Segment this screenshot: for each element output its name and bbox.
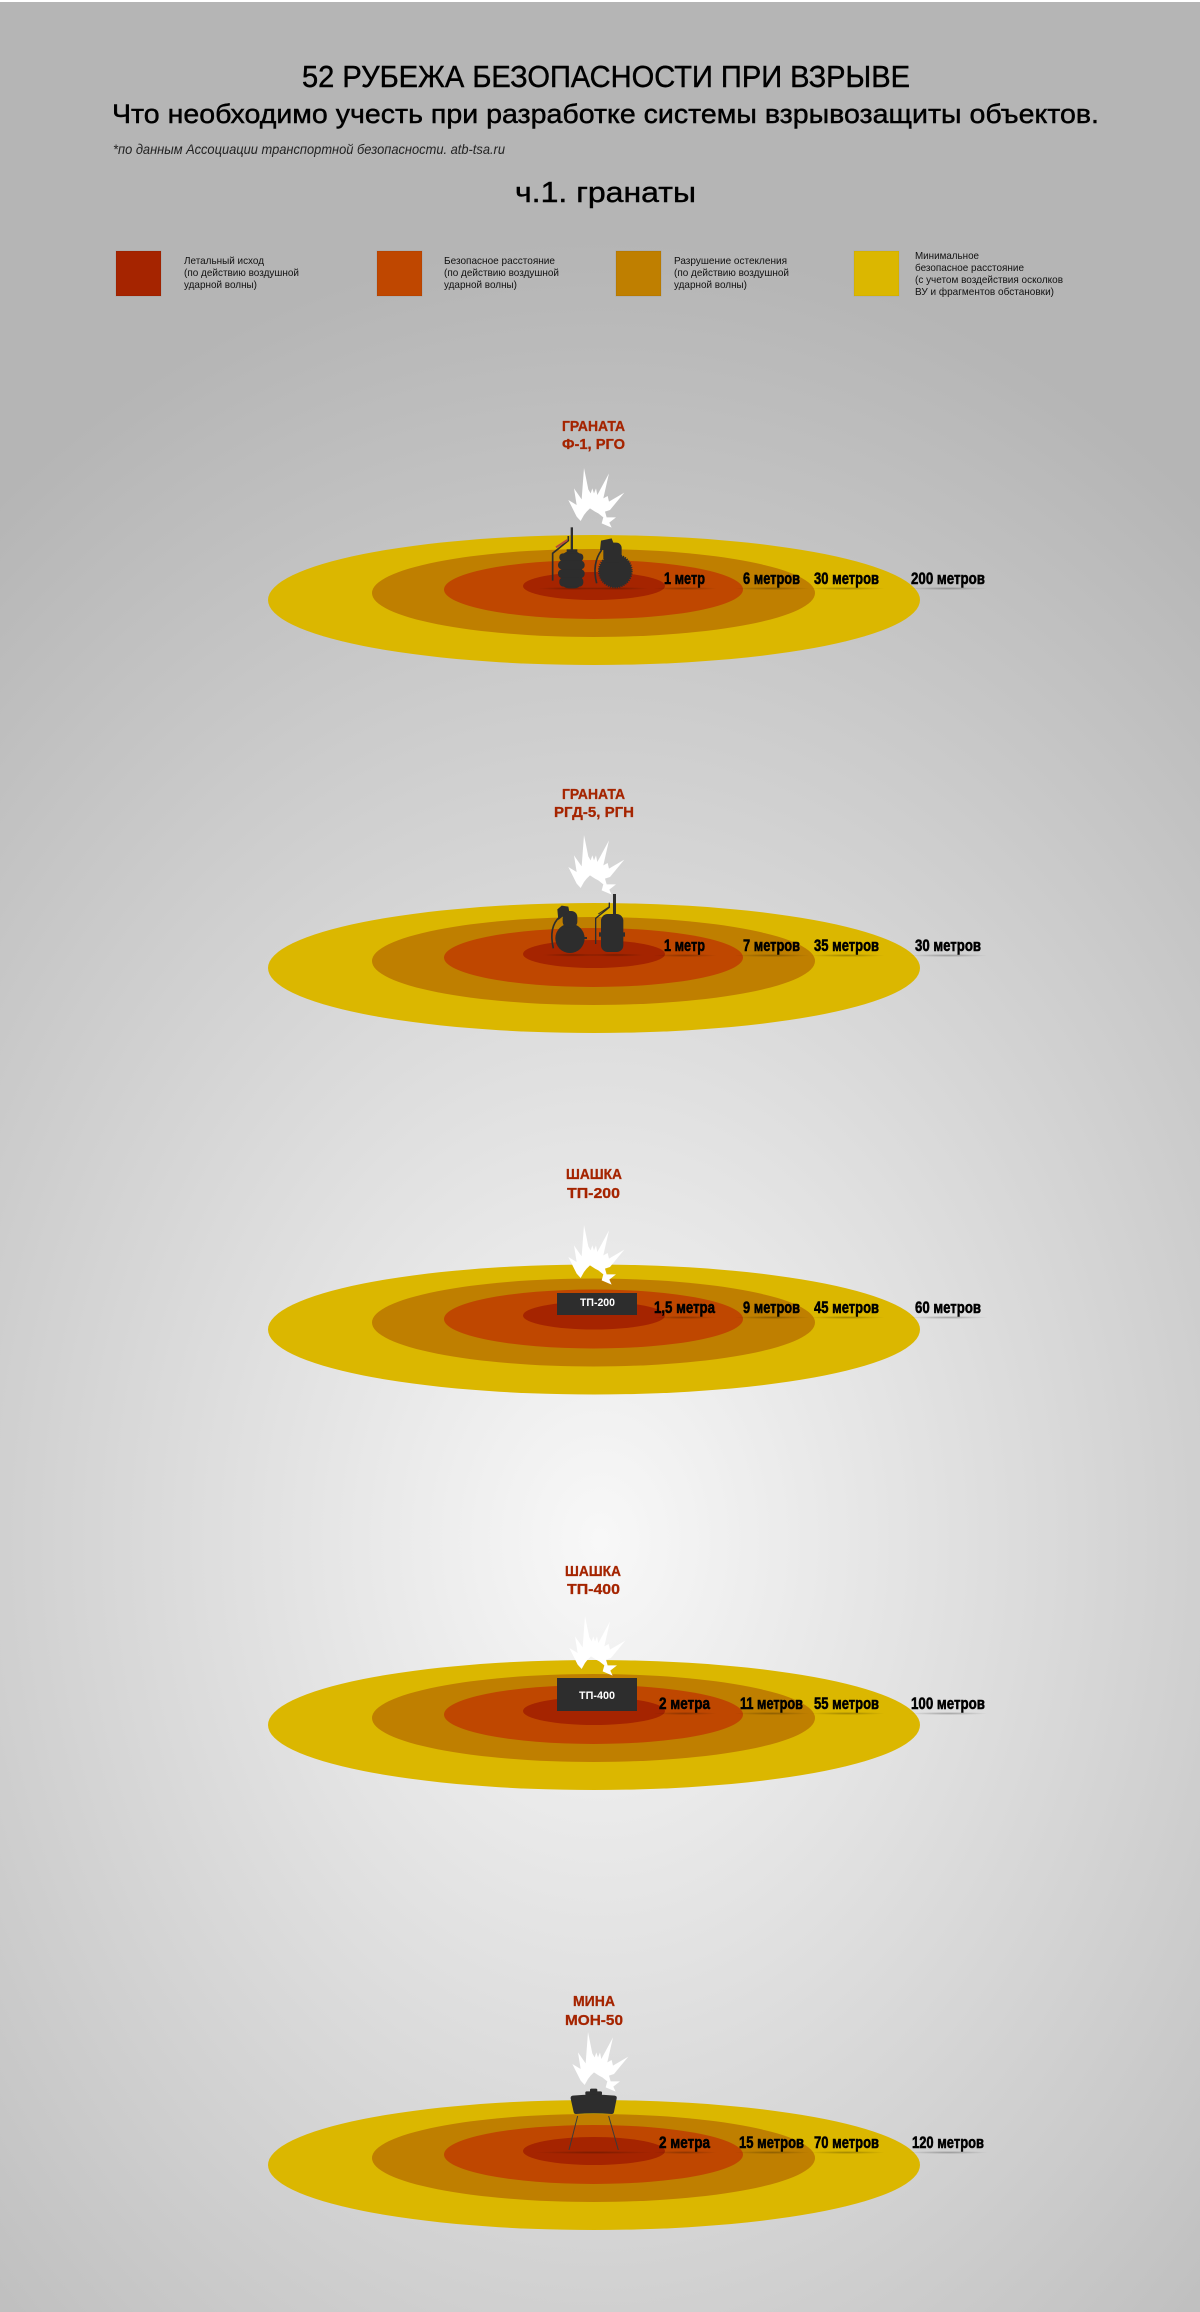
legend item: minimum safe distance [854,250,1063,298]
distance labels [653,2133,988,2154]
legend item: lethal: (по действию воздушной [184,267,299,279]
distance labels: 1,5 метра [654,1298,715,1317]
legend item: lethal [116,251,299,296]
distance labels: 1 метр [664,569,705,588]
icon: grenades [553,527,632,588]
heading: ШАШКА [566,1166,622,1183]
panel: charge TP-200 [268,1166,988,1394]
legend item: lethal: Летальный исход [184,255,264,267]
distance labels: 2 метра [659,2133,710,2152]
icon: TP-200 block: ТП-200 [580,1297,615,1309]
legend item: glass destruction: ударной волны) [674,279,747,291]
distance labels: 9 метров [743,1298,800,1317]
source note: *по данным Ассоциации транспортной безопасности. atb-tsa.ru [113,141,505,157]
icon: explosion [568,468,624,528]
distance labels: 120 метров [912,2133,984,2152]
zones [268,2100,920,2230]
distance labels: 35 метров [814,936,879,955]
icon: grenades [552,894,625,953]
zones [268,1660,920,1790]
heading: Ф-1, РГО [562,436,625,453]
heading [565,1993,623,2029]
icon: explosion [568,835,624,895]
heading [566,1166,622,1202]
panel: charge TP-400 [268,1563,988,1790]
zones [268,903,920,1033]
icon: explosion [568,1225,624,1285]
icon: explosion [569,1616,625,1676]
distance labels: 11 метров [740,1694,803,1713]
legend item: safe distance [377,251,559,296]
heading: МОН-50 [565,2012,623,2029]
zones [268,535,920,665]
distance labels [653,1694,988,1715]
panel: mine MON-50 [268,1993,988,2230]
legend item: minimum safe distance: (с учетом воздействия осколков [915,274,1063,286]
heading: ШАШКА [565,1563,621,1580]
legend item: minimum safe distance: безопасное расстояние [915,262,1024,274]
legend item: safe distance: (по действию воздушной [444,267,559,279]
legend item: glass destruction: (по действию воздушной [674,267,789,279]
icon: TP-400 block [557,1678,637,1711]
heading: ТП-400 [567,1581,620,1598]
distance labels [653,936,988,957]
heading: ГРАНАТА [562,418,625,435]
heading: РГД-5, РГН [554,804,634,821]
legend item: minimum safe distance: Минимальное [915,250,979,262]
distance labels: 15 метров [739,2133,804,2152]
legend item: safe distance: Безопасное расстояние [444,255,555,267]
distance labels: 55 метров [814,1694,879,1713]
distance labels: 60 метров [915,1298,981,1317]
legend item: safe distance: ударной волны) [444,279,517,291]
distance labels: 200 метров [911,569,985,588]
distance labels: 2 метра [659,1694,710,1713]
distance labels [653,1298,988,1319]
distance labels: 45 метров [814,1298,879,1317]
distance labels: 100 метров [911,1694,985,1713]
distance labels: 30 метров [915,936,981,955]
heading [562,418,625,453]
panel: grenade RGD-5, RGN [268,786,988,1033]
section heading: ч.1. гранаты [515,177,696,209]
icon: TP-400 block: ТП-400 [579,1690,615,1702]
legend item: glass destruction [616,251,789,296]
zones [268,1264,920,1394]
icon: explosion [572,2032,628,2092]
legend item: minimum safe distance: ВУ и фрагментов обстановки) [915,286,1054,298]
heading [554,786,634,821]
icon: mine [569,2089,618,2150]
panel: grenade F-1, RGO [268,418,988,665]
legend item: glass destruction: Разрушение остекления [674,255,787,267]
distance labels: 30 метров [814,569,879,588]
title: 52 РУБЕЖА БЕЗОПАСНОСТИ ПРИ ВЗРЫВЕ [302,59,910,94]
legend item: lethal: ударной волны) [184,279,257,291]
distance labels: 1 метр [664,936,705,955]
heading [565,1563,621,1598]
distance labels: 6 метров [743,569,800,588]
heading: ГРАНАТА [562,786,625,803]
distance labels [653,569,988,590]
distance labels: 7 метров [743,936,800,955]
distance labels: 70 метров [814,2133,879,2152]
subtitle: Что необходимо учесть при разработке системы взрывозащиты объектов. [112,99,1099,129]
heading: ТП-200 [567,1185,620,1202]
legend [116,250,1063,298]
heading: МИНА [573,1993,615,2010]
icon: TP-200 block [557,1293,637,1315]
